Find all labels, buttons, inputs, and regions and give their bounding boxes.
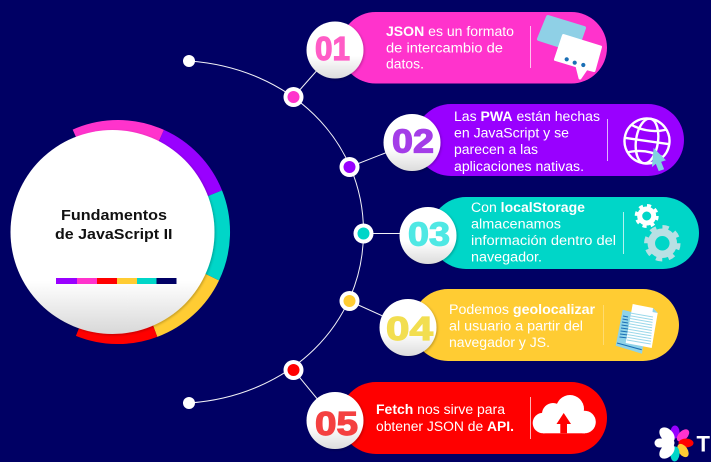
ring segment: teal — [212, 193, 222, 277]
title: de JavaScript II — [55, 226, 172, 243]
icon: chat bubbles — [539, 17, 600, 78]
text: información dentro del — [471, 233, 616, 248]
number disc — [380, 299, 436, 356]
divider — [530, 397, 532, 439]
panel: step 01 JSON — [306, 12, 607, 84]
number: 05 — [315, 405, 358, 442]
pill — [430, 197, 699, 269]
divider — [530, 26, 532, 68]
text: al usuario a partir del — [449, 318, 583, 334]
arc end dot: bottom — [183, 397, 195, 409]
text — [471, 200, 616, 265]
icon: documents — [616, 304, 658, 354]
divider — [602, 305, 604, 345]
panel: step 05 Fetch — [306, 382, 607, 454]
logo — [654, 424, 710, 462]
white disc — [10, 130, 214, 334]
number disc — [306, 392, 364, 449]
text: Podemos geolocalizar — [449, 302, 596, 317]
ring segment: pink — [76, 128, 161, 137]
icon: cloud upload — [533, 395, 596, 433]
text: Con localStorage — [471, 200, 586, 215]
text: almacenamos — [471, 216, 561, 232]
number disc — [400, 207, 456, 264]
pill — [412, 289, 679, 361]
pill — [340, 12, 607, 84]
text: Las PWA están hechas — [454, 109, 600, 124]
text — [454, 109, 600, 174]
number: 03 — [408, 216, 450, 252]
logo letter: T — [696, 432, 710, 456]
icon: globe with cursor — [622, 116, 672, 170]
text — [449, 302, 596, 350]
pill — [340, 382, 607, 454]
ring segment: red — [79, 328, 154, 336]
divider — [606, 119, 608, 161]
title — [55, 207, 172, 243]
node 04 — [340, 291, 360, 311]
node 05 — [284, 360, 304, 380]
ring segment: purple — [161, 137, 215, 193]
number disc — [384, 114, 440, 171]
node 03 — [354, 224, 374, 244]
icon: gears — [636, 206, 678, 259]
icon: logo flower — [654, 424, 694, 462]
pill — [415, 104, 684, 176]
node 01 — [284, 87, 304, 107]
text — [386, 24, 514, 72]
node 02 — [340, 157, 360, 177]
text: en JavaScript y se — [454, 126, 569, 141]
colour bar — [56, 278, 176, 284]
panel: step 02 PWA — [384, 104, 684, 176]
text: JSON es un formato — [386, 24, 514, 39]
text: datos. — [386, 56, 424, 72]
text: Fetch nos sirve para — [376, 402, 506, 417]
number: 04 — [386, 310, 434, 347]
title: Fundamentos — [61, 207, 167, 224]
text: obtener JSON de API. — [376, 419, 514, 434]
text: de intercambio de — [386, 40, 503, 55]
text: aplicaciones nativas. — [454, 159, 584, 174]
panel: step 04 geolocalizar — [380, 289, 679, 361]
main circle with coloured ring — [10, 128, 222, 336]
text: navegador. — [471, 250, 542, 265]
panel: step 03 localStorage — [400, 197, 699, 269]
ring segment: yellow — [154, 277, 212, 329]
number: 01 — [315, 30, 350, 67]
number disc — [306, 22, 364, 78]
timeline arc with connectors — [189, 50, 428, 420]
divider — [622, 212, 624, 254]
arc end dot: top — [183, 55, 195, 67]
number: 02 — [392, 122, 434, 160]
text: navegador y JS. — [449, 335, 550, 350]
text — [376, 402, 514, 434]
text: parecen a las — [454, 142, 538, 157]
